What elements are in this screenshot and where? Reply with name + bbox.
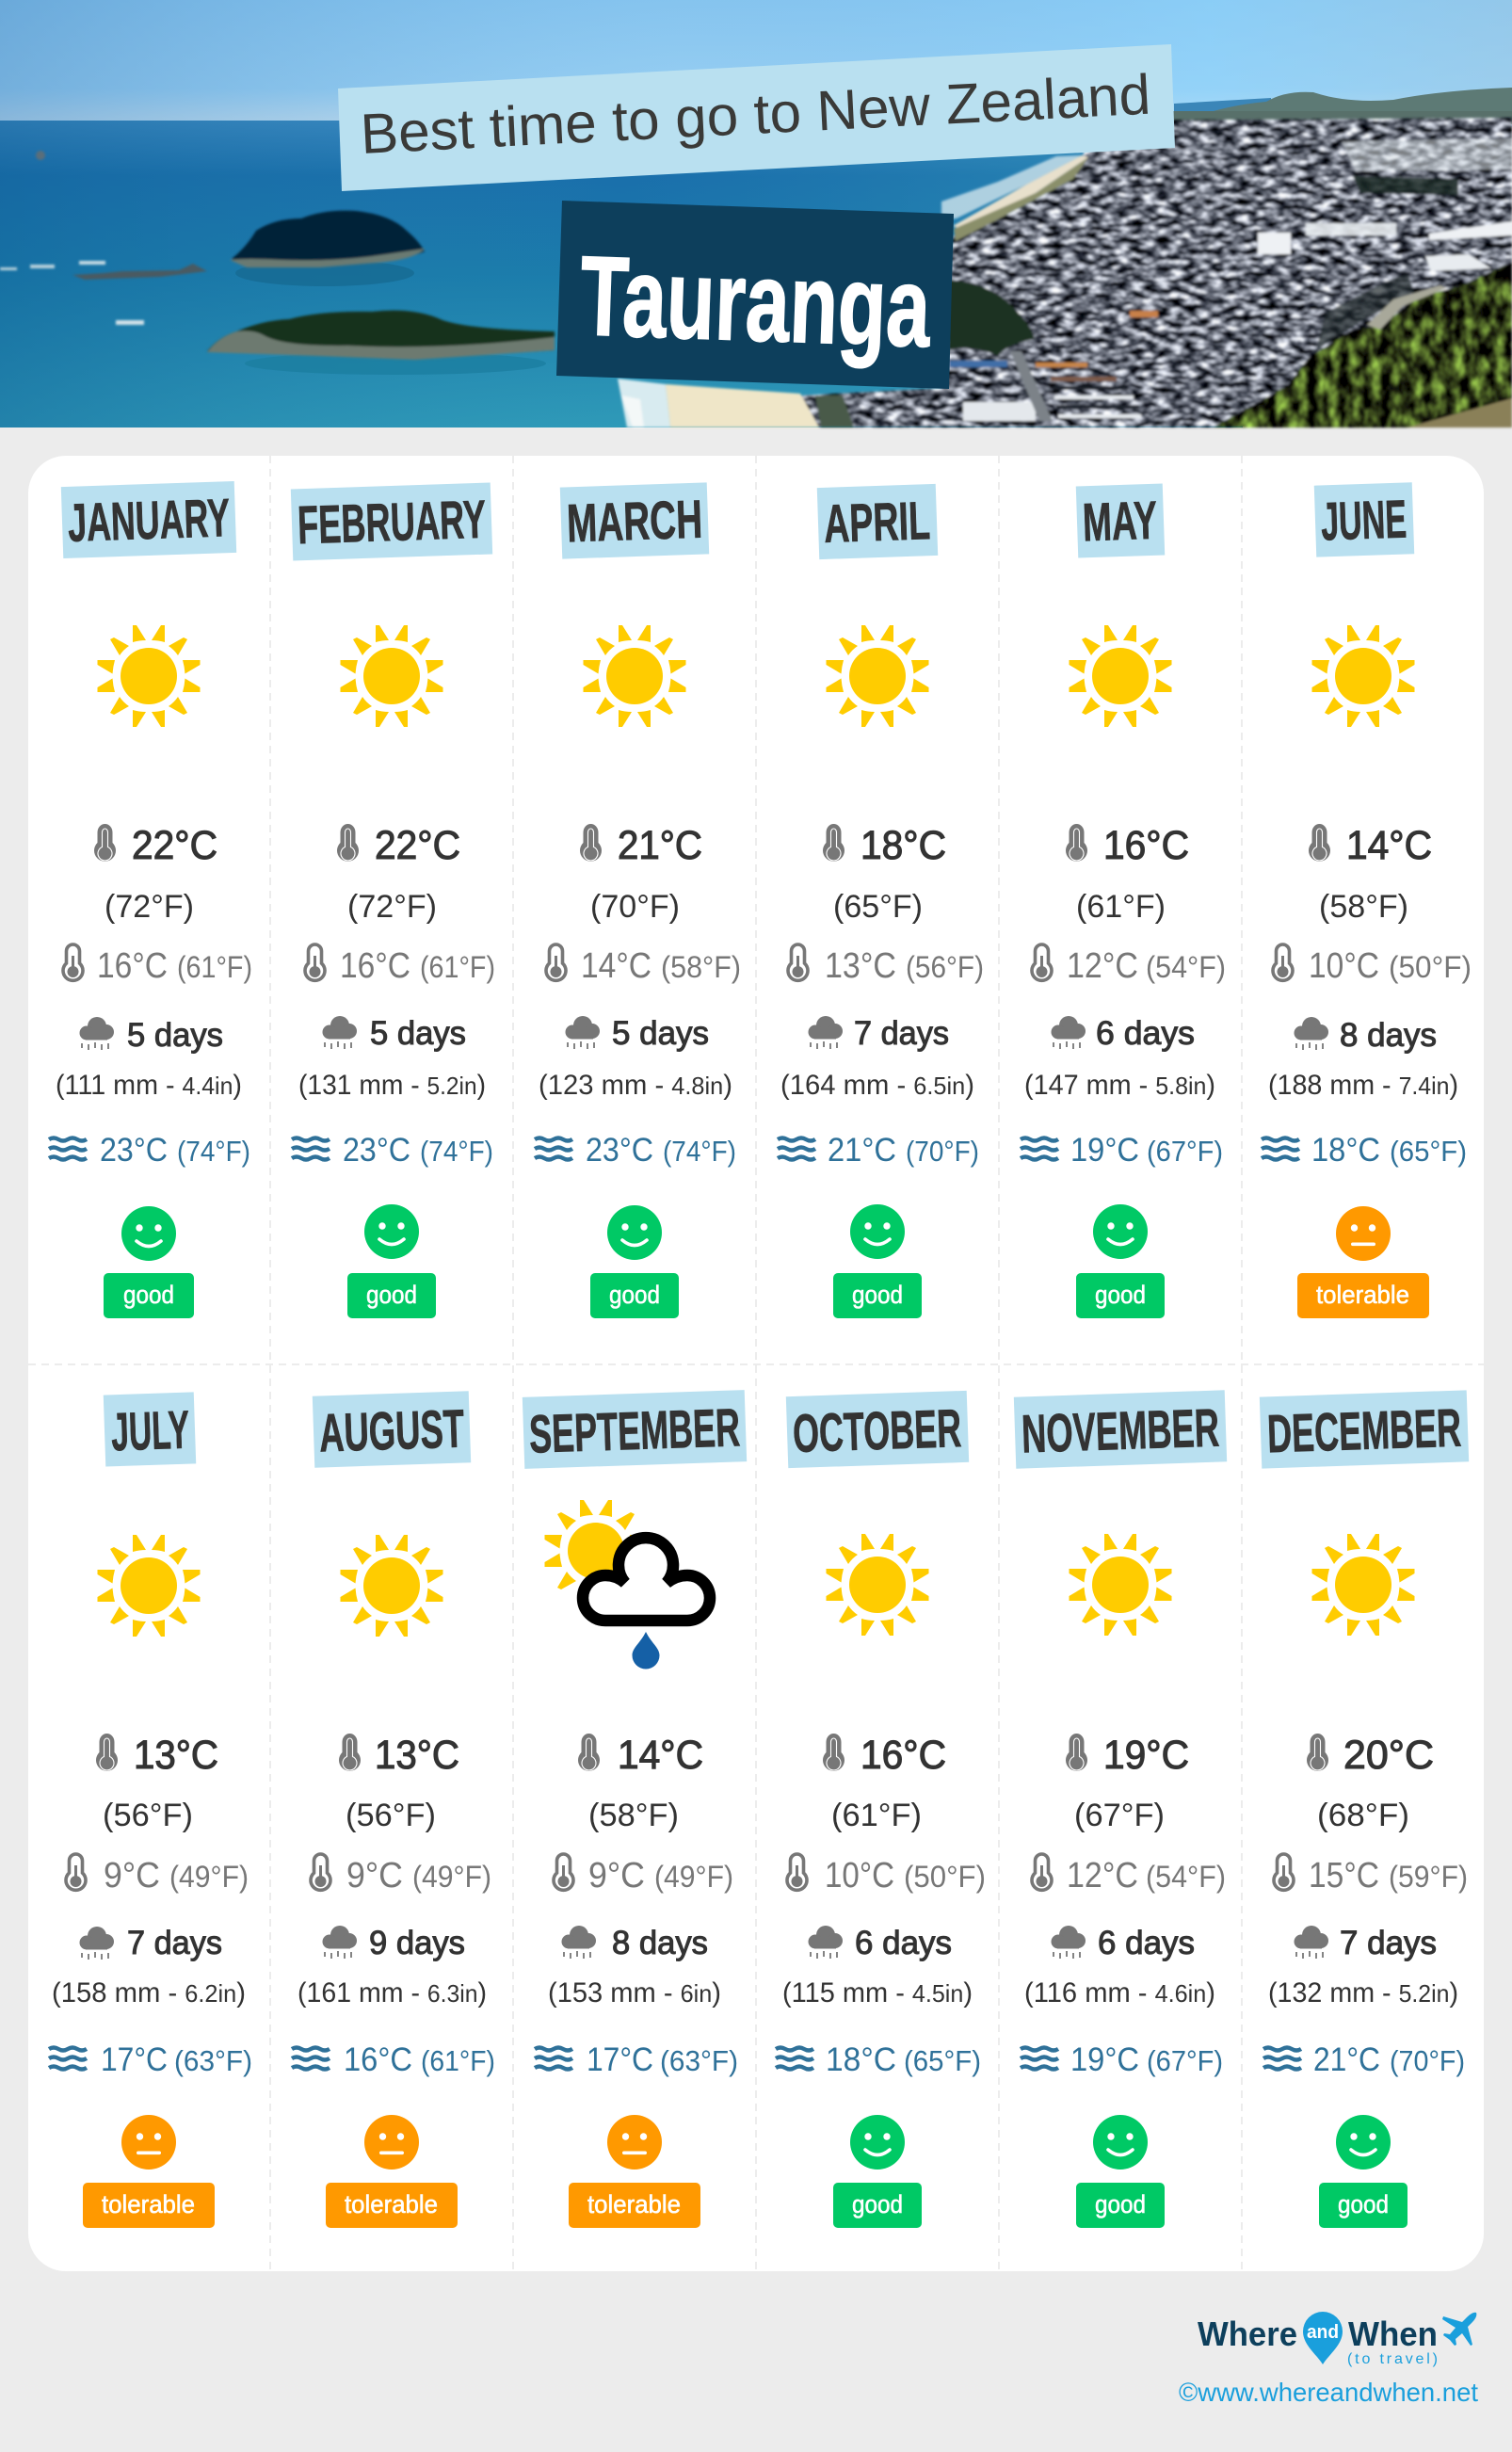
low temperature: (49°F) <box>412 1860 491 1894</box>
high temperature: (67°F) <box>1074 1798 1165 1833</box>
sea temperature: 17°C <box>101 2041 168 2078</box>
panel: December <box>1260 1390 1469 2228</box>
low temperature: 15°C <box>1309 1856 1379 1895</box>
sea temperature <box>292 2041 495 2078</box>
low temperature: 12°C <box>1067 1856 1138 1895</box>
rating: tolerable <box>569 2115 700 2228</box>
month label <box>1076 483 1165 558</box>
high temperature <box>339 1733 459 1833</box>
sea temperature: (74°F) <box>177 1135 250 1168</box>
logo: Where and When to travel: When <box>1348 2315 1438 2353</box>
rating: tolerable <box>326 2115 458 2228</box>
low temperature <box>66 1854 249 1895</box>
icon: sun <box>827 625 928 727</box>
sea temperature: 23°C <box>586 1132 653 1169</box>
rainfall <box>539 1015 732 1101</box>
panel: November <box>1014 1390 1227 2228</box>
rainfall: (188 mm - 7.4in) <box>1268 1070 1458 1101</box>
high temperature: (68°F) <box>1317 1798 1409 1833</box>
high temperature: 13°C <box>134 1733 218 1778</box>
month label: MARCH <box>566 490 703 554</box>
high temperature: (58°F) <box>588 1798 679 1833</box>
sea temperature: (74°F) <box>420 1135 493 1168</box>
high temperature: 22°C <box>132 823 217 868</box>
logo: Where and When to travel: and <box>1307 2322 1339 2343</box>
climate card <box>28 456 1484 2271</box>
month label: AUGUST <box>318 1398 465 1464</box>
high temperature: (70°F) <box>590 889 680 925</box>
sea temperature <box>535 2041 738 2078</box>
shoreline <box>941 155 1082 220</box>
icon: sun <box>1070 625 1171 727</box>
rainfall: (123 mm - 4.8in) <box>539 1070 732 1101</box>
icon: sun <box>1312 625 1414 727</box>
rainfall: 8 days <box>612 1925 708 1961</box>
high temperature: (56°F) <box>103 1798 193 1833</box>
panel: April <box>778 484 984 1318</box>
high temperature: 14°C <box>618 1733 703 1778</box>
high temperature <box>823 1733 946 1833</box>
low temperature <box>1032 1854 1226 1895</box>
icon: sun <box>98 1535 200 1637</box>
month label <box>313 1391 471 1468</box>
rating: tolerable: tolerable <box>102 2190 195 2218</box>
rainfall <box>1024 1015 1215 1101</box>
low temperature: (49°F) <box>654 1860 733 1894</box>
low temperature: 16°C <box>340 946 410 986</box>
high temperature <box>578 1733 703 1833</box>
sea temperature: 19°C <box>1070 1132 1139 1169</box>
rating: good: good <box>123 1281 174 1309</box>
rainfall: 8 days <box>1340 1017 1437 1054</box>
rainfall: 9 days <box>369 1925 465 1961</box>
high temperature: 19°C <box>1103 1733 1189 1778</box>
low temperature <box>788 944 984 986</box>
high temperature: (72°F) <box>105 889 194 925</box>
low temperature: 10°C <box>825 1856 894 1895</box>
rainfall: 5 days <box>370 1015 466 1052</box>
rainfall: (116 mm - 4.6in) <box>1024 1977 1215 2008</box>
low temperature: (50°F) <box>904 1860 986 1894</box>
sea temperature: 21°C <box>1313 2041 1380 2078</box>
sea temperature <box>1021 2041 1223 2078</box>
sea temperature: 23°C <box>100 1132 168 1169</box>
high temperature: 21°C <box>618 823 702 868</box>
month label: JULY <box>110 1400 190 1462</box>
islands <box>232 211 425 266</box>
high temperature <box>580 823 702 925</box>
month label: APRIL <box>823 491 931 555</box>
rainfall: 5 days <box>612 1015 709 1052</box>
low temperature: (58°F) <box>661 950 741 984</box>
high temperature: 16°C <box>861 1733 946 1778</box>
low temperature: 10°C <box>1309 946 1379 986</box>
sea temperature: 23°C <box>343 1132 410 1169</box>
rating: good <box>1319 2115 1407 2228</box>
rating: good: good <box>609 1281 660 1309</box>
rating: tolerable: tolerable <box>1316 1281 1409 1309</box>
rating: good: good <box>852 2190 903 2218</box>
rainfall <box>1024 1925 1215 2008</box>
sea temperature: 18°C <box>826 2041 896 2078</box>
sea temperature: 19°C <box>1070 2041 1139 2078</box>
sea temperature <box>1262 1132 1467 1169</box>
month label: OCTOBER <box>792 1398 962 1464</box>
month label: JANUARY <box>67 488 231 554</box>
sea temperature <box>292 1132 493 1169</box>
hero photo: Tauranga coast and city <box>0 0 1512 427</box>
title banner <box>556 201 954 389</box>
low temperature <box>1274 1854 1468 1895</box>
panel: January <box>49 481 252 1318</box>
high temperature <box>1066 1733 1189 1833</box>
month label <box>291 483 492 560</box>
high temperature: (61°F) <box>1076 889 1166 925</box>
rainfall: (111 mm - 4.4in) <box>56 1070 242 1101</box>
title banner: Tauranga <box>578 233 933 371</box>
panel: February <box>291 483 495 1318</box>
month label <box>560 482 709 559</box>
sea temperature: 21°C <box>828 1132 896 1169</box>
high temperature: 22°C <box>375 823 460 868</box>
beach <box>618 379 670 427</box>
month label <box>817 484 938 559</box>
sea temperature: (63°F) <box>660 2044 738 2077</box>
sea temperature: (67°F) <box>1147 1135 1223 1168</box>
rainfall <box>298 1925 487 2008</box>
low temperature: (61°F) <box>420 950 495 984</box>
rating: good <box>1076 2115 1165 2228</box>
rating: tolerable: tolerable <box>587 2190 681 2218</box>
low temperature: 9°C <box>104 1856 160 1895</box>
rainfall <box>56 1017 242 1101</box>
rainfall: (164 mm - 6.5in) <box>780 1070 974 1101</box>
rainfall <box>1268 1925 1458 2008</box>
rating: tolerable <box>83 2115 215 2228</box>
low temperature <box>546 944 741 986</box>
rainfall <box>52 1925 246 2008</box>
sea temperature: (70°F) <box>1390 2044 1465 2077</box>
low temperature <box>311 1854 491 1895</box>
rating: good: good <box>366 1281 417 1309</box>
icon: sun <box>1070 1534 1171 1636</box>
rainfall: 6 days <box>855 1925 952 1961</box>
high temperature: (65°F) <box>833 889 923 925</box>
sea temperature: (61°F) <box>421 2044 495 2077</box>
rainfall: 7 days <box>854 1015 949 1052</box>
month label: NOVEMBER <box>1021 1398 1220 1464</box>
icon: sun behind rain cloud <box>544 1500 710 1669</box>
low temperature <box>1273 944 1472 986</box>
high temperature: 20°C <box>1343 1733 1434 1778</box>
rating: good <box>347 1204 436 1318</box>
sea temperature <box>1021 1132 1223 1169</box>
icon: sun <box>1312 1534 1414 1636</box>
panel: August <box>292 1391 495 2228</box>
low temperature: (61°F) <box>177 950 252 984</box>
sea temperature: (74°F) <box>663 1135 736 1168</box>
icon: sun <box>827 1534 928 1636</box>
low temperature <box>305 944 495 986</box>
rating: good: good <box>1095 2190 1146 2218</box>
rainfall <box>298 1015 486 1101</box>
sea temperature: (65°F) <box>904 2044 981 2077</box>
sea temperature <box>49 2041 252 2078</box>
low temperature: 12°C <box>1067 946 1138 986</box>
low temperature <box>63 944 252 986</box>
month label <box>1314 482 1414 557</box>
high temperature <box>1307 1733 1434 1833</box>
rating: good <box>104 1206 194 1318</box>
low temperature: (59°F) <box>1389 1860 1468 1894</box>
rainfall: (115 mm - 4.5in) <box>782 1977 973 2008</box>
sea temperature: 17°C <box>587 2041 653 2078</box>
sea temperature: 16°C <box>344 2041 412 2078</box>
city texture <box>800 118 1512 427</box>
low temperature <box>787 1854 986 1895</box>
month label: MAY <box>1082 491 1158 553</box>
high temperature <box>96 1733 218 1833</box>
vegetation <box>1213 262 1512 427</box>
month label: FEBRUARY <box>297 490 487 556</box>
month label <box>786 1391 969 1468</box>
month label <box>61 481 236 558</box>
panel: May <box>1021 483 1226 1318</box>
icon: sun <box>341 625 442 727</box>
high temperature: 18°C <box>861 823 946 868</box>
logo: Where and When to travel <box>1198 2312 1476 2367</box>
sea temperature <box>776 2041 981 2078</box>
rainfall: 7 days <box>127 1925 222 1961</box>
high temperature <box>1309 823 1432 925</box>
high temperature: 14°C <box>1346 823 1432 868</box>
rainfall: (132 mm - 5.2in) <box>1268 1977 1458 2008</box>
rating: tolerable <box>1297 1206 1429 1318</box>
high temperature: (72°F) <box>347 889 437 925</box>
rating: good <box>833 2115 922 2228</box>
rainfall: 7 days <box>1340 1925 1437 1961</box>
month label: JUNE <box>1320 489 1407 552</box>
rainfall <box>780 1015 974 1101</box>
sea temperature <box>778 1132 979 1169</box>
rating: good: good <box>1095 1281 1146 1309</box>
high temperature <box>1066 823 1189 925</box>
sea temperature <box>1263 2041 1465 2078</box>
high temperature <box>337 823 460 925</box>
month label <box>104 1392 196 1467</box>
sea temperature: (70°F) <box>906 1135 979 1168</box>
panel: October <box>776 1391 986 2228</box>
month label <box>523 1390 747 1469</box>
high temperature: (56°F) <box>346 1798 436 1833</box>
rating: good: good <box>852 1281 903 1309</box>
low temperature: (49°F) <box>169 1860 249 1894</box>
rainfall: (158 mm - 6.2in) <box>52 1977 246 2008</box>
rainfall: 6 days <box>1098 1925 1195 1961</box>
website credit: ©www.whereandwhen.net <box>1179 2378 1478 2407</box>
rainfall <box>1268 1017 1458 1101</box>
panel: June <box>1262 482 1472 1318</box>
rainfall <box>548 1925 721 2008</box>
low temperature: 9°C <box>588 1856 645 1895</box>
rating: good <box>590 1205 679 1318</box>
low temperature: (50°F) <box>1389 950 1472 984</box>
sea rocks <box>72 264 207 280</box>
sea temperature: (63°F) <box>174 2044 252 2077</box>
rainfall: (153 mm - 6in) <box>548 1977 721 2008</box>
rainfall: (131 mm - 5.2in) <box>298 1070 486 1101</box>
rainfall: (161 mm - 6.3in) <box>298 1977 487 2008</box>
high temperature <box>823 823 946 925</box>
rating: good <box>1076 1204 1165 1318</box>
month label: SEPTEMBER <box>528 1397 741 1465</box>
high temperature: (58°F) <box>1319 889 1408 925</box>
sea temperature: (65°F) <box>1390 1135 1467 1168</box>
low temperature: (54°F) <box>1146 950 1226 984</box>
rainfall <box>782 1925 973 2008</box>
month label <box>1014 1390 1227 1469</box>
low temperature: 16°C <box>97 946 168 986</box>
low temperature: 13°C <box>825 946 896 986</box>
low temperature: 14°C <box>581 946 651 986</box>
rainfall: (147 mm - 5.8in) <box>1024 1070 1215 1101</box>
rating: tolerable: tolerable <box>345 2190 438 2218</box>
sea temperature <box>49 1132 250 1169</box>
subtitle banner: Best time to go to New Zealand <box>359 63 1152 166</box>
icon: sun <box>98 625 200 727</box>
sea temperature: 18°C <box>1311 1132 1380 1169</box>
icon: sun <box>341 1535 442 1637</box>
panel: September <box>523 1390 747 2228</box>
rainfall: 5 days <box>127 1017 223 1054</box>
logo: Where and When to travel: Where <box>1198 2315 1297 2353</box>
low temperature <box>554 1854 733 1895</box>
panel: July <box>49 1392 252 2228</box>
rating: good: good <box>1338 2190 1389 2218</box>
high temperature: 16°C <box>1103 823 1189 868</box>
low temperature: (54°F) <box>1146 1860 1226 1894</box>
high temperature: 13°C <box>375 1733 459 1778</box>
sea temperature <box>535 1132 736 1169</box>
logo: Where and When to travel: (to travel) <box>1347 2351 1438 2367</box>
rainfall: 6 days <box>1096 1015 1195 1052</box>
rating: good <box>833 1204 922 1318</box>
panel: March <box>535 482 741 1318</box>
subtitle banner <box>338 44 1175 191</box>
high temperature <box>94 823 217 925</box>
low temperature: 9°C <box>346 1856 403 1895</box>
high temperature: (61°F) <box>831 1798 922 1833</box>
icon: sun <box>584 625 685 727</box>
sea temperature: (67°F) <box>1147 2044 1223 2077</box>
low temperature <box>1032 944 1226 986</box>
low temperature: (56°F) <box>906 950 984 984</box>
